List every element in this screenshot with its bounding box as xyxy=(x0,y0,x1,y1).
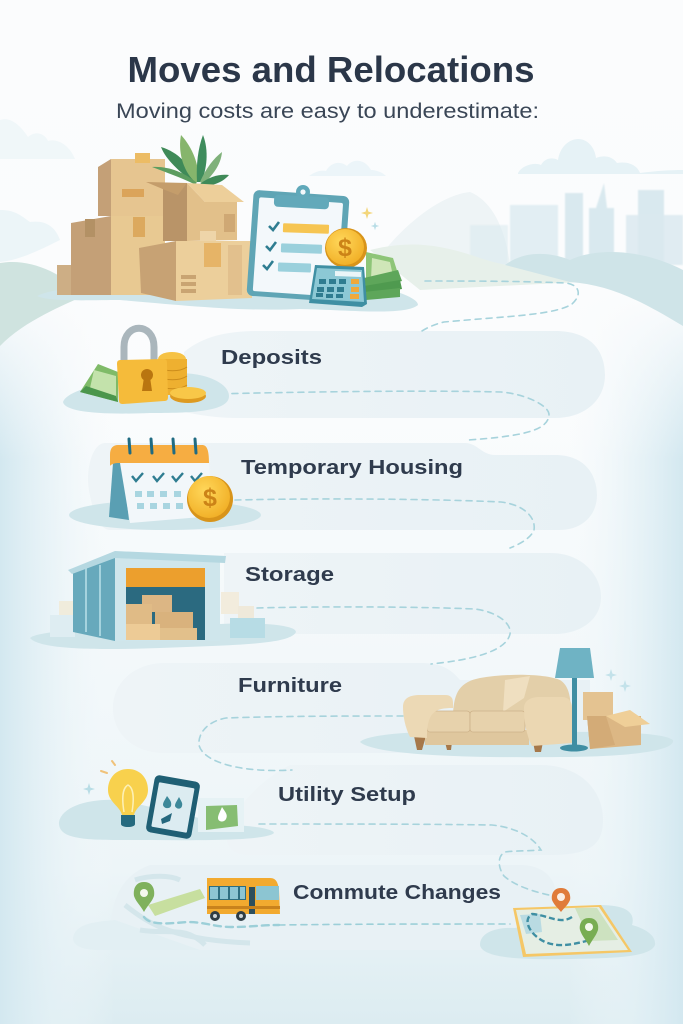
route: commute path xyxy=(144,917,510,927)
blob xyxy=(30,623,296,649)
illustration: sofa, lamp and boxes xyxy=(360,648,673,757)
green pin xyxy=(134,882,154,912)
clipboard checklist xyxy=(246,185,350,302)
street network xyxy=(125,876,250,945)
seat cushions xyxy=(427,711,525,732)
label: utility setup: Utility Setup xyxy=(278,783,416,806)
illustration: padlock and coins xyxy=(63,328,229,414)
illustration: storage unit xyxy=(30,551,296,649)
sparkles xyxy=(361,207,379,230)
sparkles xyxy=(605,669,631,692)
orange pin xyxy=(552,888,570,912)
box: small left xyxy=(57,265,107,295)
calendar header xyxy=(110,445,209,466)
sofa left arm xyxy=(403,695,453,738)
label: storage: Storage xyxy=(245,563,334,586)
cash xyxy=(80,364,118,402)
shackle xyxy=(124,328,154,364)
label: deposits: Deposits xyxy=(221,346,322,369)
coin xyxy=(325,228,367,268)
coin xyxy=(187,476,233,522)
label: commute changes: Commute Changes xyxy=(293,881,501,904)
blob xyxy=(59,800,274,840)
rings xyxy=(129,439,196,453)
coin stack xyxy=(158,352,187,395)
pale boxes behind xyxy=(50,592,265,638)
door opening xyxy=(126,586,205,640)
floor lamp xyxy=(555,648,594,752)
lock body xyxy=(117,359,168,404)
title: Moves and Relocations xyxy=(128,49,534,90)
coin: $ xyxy=(203,484,217,512)
spark marks xyxy=(101,761,115,773)
calendar back xyxy=(109,463,129,520)
blob xyxy=(63,373,229,414)
coin: $ xyxy=(338,234,352,262)
label: temporary housing: Temporary Housing xyxy=(241,456,463,479)
side wall xyxy=(73,557,115,641)
light bulb xyxy=(108,769,148,827)
panel: utility setup xyxy=(227,765,603,855)
sofa base xyxy=(425,730,529,745)
illustration: bulb, phone and bill xyxy=(59,761,274,840)
smartphone xyxy=(145,774,201,840)
sofa right arm xyxy=(524,697,572,746)
plant xyxy=(152,135,229,186)
roof xyxy=(68,551,226,574)
blob xyxy=(360,731,673,757)
blob xyxy=(480,905,655,959)
box: open xyxy=(146,182,244,241)
illustration: pin, map strip and bus xyxy=(134,878,280,921)
label: furniture: Furniture xyxy=(238,674,342,697)
panel: temporary housing xyxy=(88,443,597,530)
city skyline xyxy=(470,183,683,265)
green pin xyxy=(580,918,598,946)
legs xyxy=(414,736,543,752)
box: middle xyxy=(71,216,165,295)
route: dashed path xyxy=(199,281,578,895)
road map strip xyxy=(148,889,205,916)
panel: furniture xyxy=(113,663,590,753)
map sheet xyxy=(513,905,632,957)
clouds xyxy=(0,119,683,176)
cash pile xyxy=(364,252,402,300)
illustration: map with pins xyxy=(480,888,655,959)
subtitle: Moving costs are easy to underestimate: xyxy=(116,100,539,123)
illustration: calendar and coin xyxy=(69,439,261,530)
school bus xyxy=(207,878,280,921)
bill card xyxy=(198,798,244,832)
date grid xyxy=(135,491,183,509)
illustration: moving boxes, plant, checklist and money xyxy=(37,135,418,312)
panel: deposits xyxy=(184,331,605,418)
box: top xyxy=(98,153,165,216)
map route xyxy=(528,914,590,945)
sparkle xyxy=(83,783,95,795)
box: front xyxy=(139,231,252,301)
cushion crease xyxy=(503,676,530,712)
cardboard boxes xyxy=(126,595,197,640)
sofa back xyxy=(453,675,571,714)
calendar page xyxy=(120,463,213,523)
shadow xyxy=(37,284,418,312)
panel: commute left blob xyxy=(73,920,200,950)
panel: storage xyxy=(224,553,601,634)
panel: commute changes xyxy=(110,865,556,950)
distant mountains xyxy=(385,192,510,265)
front wall xyxy=(115,557,220,641)
roller door xyxy=(126,568,205,587)
single coin xyxy=(170,387,206,403)
blob xyxy=(69,500,261,530)
calculator xyxy=(309,265,367,307)
boxes xyxy=(583,692,650,749)
checks xyxy=(132,473,202,481)
hills xyxy=(0,210,683,346)
